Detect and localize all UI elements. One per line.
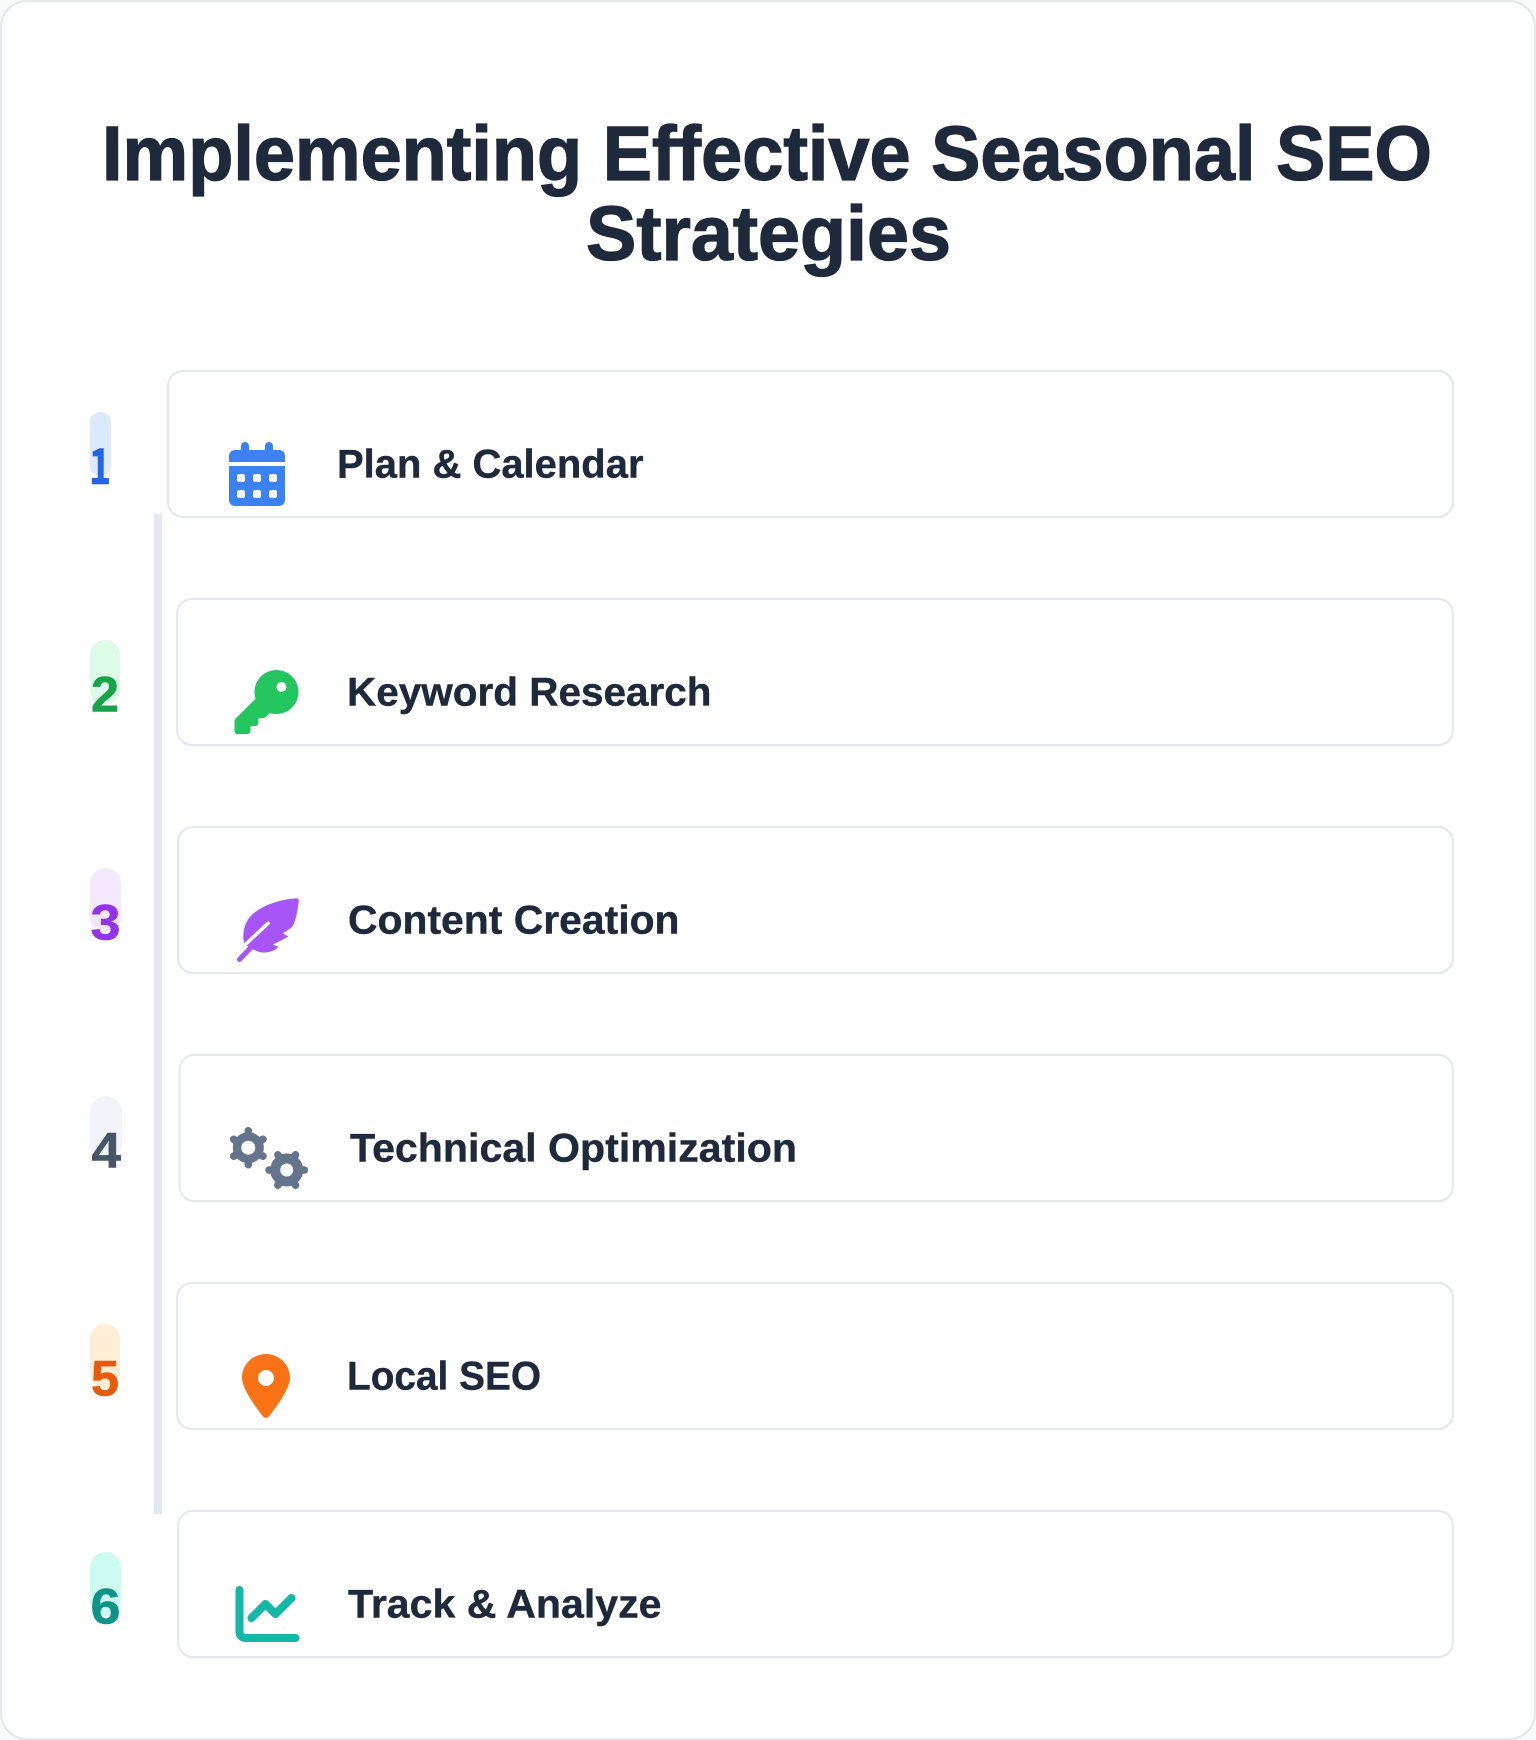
step 6: Track & Analyze [90, 1511, 1453, 1657]
number 4: 4 [92, 1122, 121, 1178]
card 6 [178, 1511, 1453, 1657]
number 6: 6 [90, 1578, 120, 1634]
card 1 [168, 371, 1453, 517]
timeline connector line [154, 514, 162, 1514]
number 2: 2 [91, 666, 119, 722]
icon: gears [234, 1131, 304, 1185]
step 5: Local SEO [90, 1283, 1453, 1429]
label 3: Content Creation [348, 898, 680, 942]
icon: calendar [229, 442, 285, 506]
number pill 3 [90, 868, 121, 932]
card 4 [180, 1055, 1453, 1201]
number pill 4 [90, 1096, 122, 1160]
number 3: 3 [90, 894, 120, 950]
number pill 6 [90, 1552, 121, 1616]
card 3 [178, 827, 1453, 973]
icon: key [234, 670, 298, 734]
icon: feather [240, 898, 299, 960]
icon: map pin [242, 1354, 290, 1418]
label 1: Plan & Calendar [337, 442, 644, 486]
number 5: 5 [91, 1350, 119, 1406]
title: Implementing Effective Seasonal SEO [102, 111, 1432, 197]
icon: line chart [236, 1586, 300, 1642]
number 1: 1 [89, 428, 111, 499]
step 2: Keyword Research [90, 599, 1453, 745]
step 1: Plan & Calendar [89, 371, 1453, 517]
label 6: Track & Analyze [348, 1582, 662, 1626]
step 4: Technical Optimization [90, 1055, 1453, 1201]
label 5: Local SEO [347, 1354, 541, 1398]
card 5 [177, 1283, 1453, 1429]
number pill 5 [90, 1324, 120, 1388]
label 2: Keyword Research [347, 670, 712, 714]
title: Strategies [586, 191, 951, 277]
card 2 [177, 599, 1453, 745]
label 4: Technical Optimization [350, 1126, 797, 1170]
step 3: Content Creation [90, 827, 1453, 973]
title [102, 111, 1432, 277]
number pill 2 [90, 640, 120, 704]
number pill 1 [90, 412, 111, 476]
